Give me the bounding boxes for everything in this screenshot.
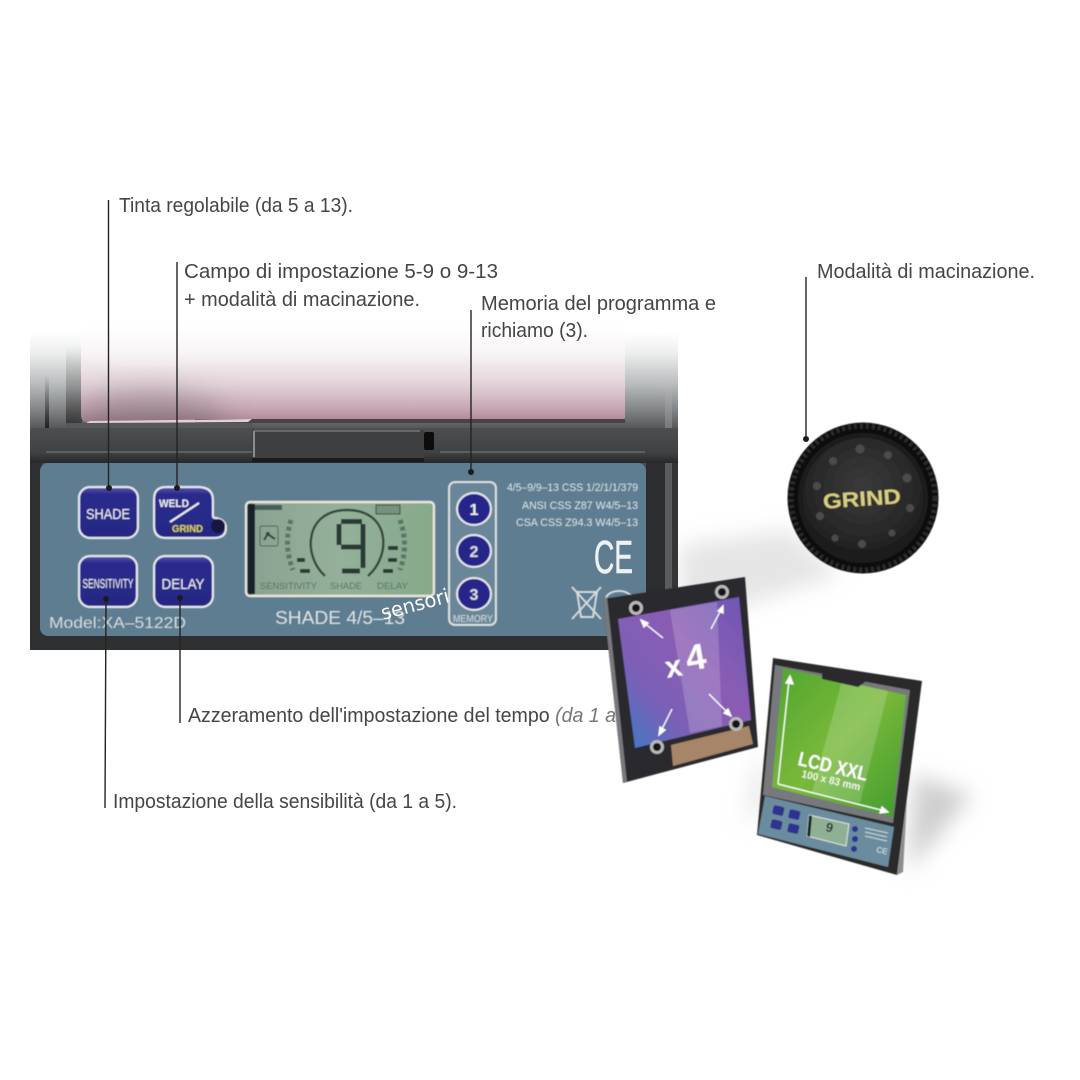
button: SHADE: SHADE	[86, 506, 130, 523]
label: sensibilità: Impostazione della sensibilità (da 1 a 5).	[113, 791, 457, 813]
CE mark: CE	[594, 531, 633, 583]
product card: LCD XXL	[757, 658, 922, 875]
button: SENSITIVITY	[79, 556, 137, 607]
LCD display: SENSITIVITY	[260, 581, 317, 591]
icon: crossed-out bin	[572, 587, 632, 619]
leader: tempo	[177, 595, 183, 723]
button: WELD / GRIND: WELD	[159, 498, 189, 510]
product card: x4 lens: 4	[682, 635, 709, 679]
product card: LCD XXL: LCD XXL	[796, 748, 870, 786]
button: DELAY	[154, 556, 213, 607]
button: WELD / GRIND: GRIND	[172, 524, 203, 535]
shade range text: SHADE 4/5–13	[275, 608, 405, 628]
leader: tinta	[106, 200, 112, 491]
label: memoria del programma: Memoria del programma e	[481, 293, 716, 315]
label: azzeramento: Azzeramento dell'impostazione del tempo (da 1 a	[188, 705, 616, 727]
label: campo di impostazione: Campo di impostazione 5-9 o 9-13	[184, 261, 498, 283]
icon: GRIND knob: GRIND	[822, 485, 902, 514]
memory buttons: 1	[470, 502, 479, 519]
bottom frame	[30, 634, 678, 650]
lower frame notch	[30, 423, 678, 463]
label: modalità di macinazione: Modalità di macinazione.	[817, 261, 1035, 283]
mini control panel: 9	[824, 819, 835, 836]
sensori overlay: sensori	[378, 584, 452, 625]
panel specification text	[507, 482, 638, 529]
frame bevel strips	[45, 360, 672, 650]
LCD display: DELAY	[377, 581, 408, 591]
label: memoria del programma	[481, 293, 716, 342]
leader: sensibilità	[103, 596, 109, 808]
mini control panel: CE	[876, 845, 888, 856]
device: welding cartridge close-up	[30, 325, 678, 650]
leader: macinazione	[803, 277, 809, 442]
LCD display	[246, 502, 434, 596]
memory buttons: 2	[470, 544, 479, 561]
right frame side	[646, 463, 678, 650]
panel specification text: ANSI CSS Z87 W4/5–13	[522, 500, 638, 512]
panel specification text: CSA CSS Z94.3 W4/5–13	[516, 517, 638, 529]
button: WELD / GRIND	[154, 487, 226, 538]
label: memoria del programma: richiamo (3).	[481, 320, 588, 342]
viewing window	[66, 325, 625, 456]
memory buttons: 3	[470, 587, 479, 604]
product card: LCD XXL: 100 x 83 mm	[800, 768, 861, 793]
label: campo di impostazione	[184, 261, 498, 311]
memory buttons	[449, 482, 496, 625]
LCD display: SHADE	[330, 581, 362, 591]
leader: memoria	[468, 310, 474, 475]
soft shadow behind product cards	[680, 530, 972, 872]
button: DELAY: DELAY	[162, 576, 204, 593]
button: SENSITIVITY: SENSITIVITY	[82, 576, 134, 591]
mini control panel	[758, 796, 894, 867]
product card: x4 lens: x	[662, 649, 685, 685]
leader: campo	[174, 262, 180, 491]
label: tinta regolabile: Tinta regolabile (da 5 a 13).	[119, 195, 353, 217]
device frame	[30, 325, 678, 650]
label: campo di impostazione: + modalità di macinazione.	[184, 289, 420, 311]
left frame side	[30, 463, 42, 635]
button: SHADE	[79, 487, 138, 538]
product card: x4 lens	[603, 577, 758, 783]
icon: GRIND knob	[788, 422, 938, 574]
memory buttons: MEMORY	[453, 613, 493, 625]
control panel	[40, 463, 646, 636]
panel specification text: 4/5–9/9–13 CSS 1/2/1/1/379	[507, 482, 638, 494]
model text: Model:XA–5122D	[49, 615, 186, 632]
